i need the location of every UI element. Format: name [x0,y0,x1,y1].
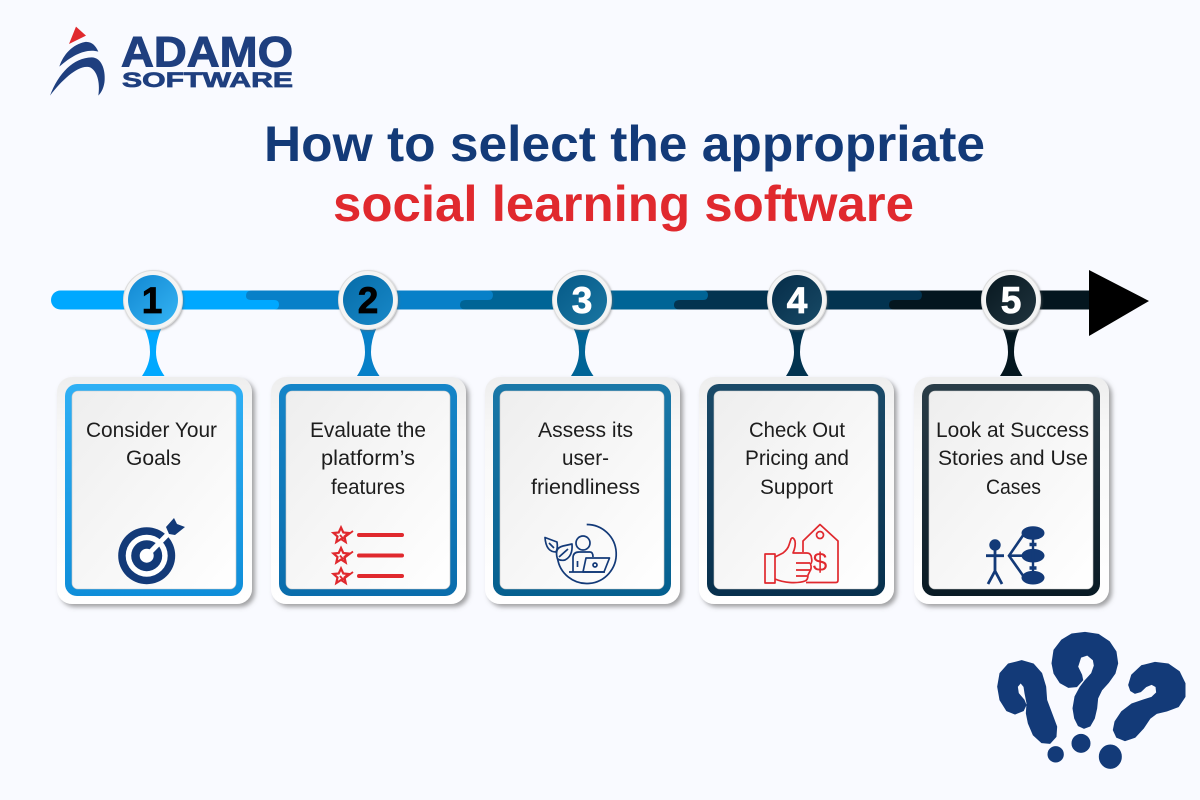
step 4 text: Check Out [749,418,845,442]
icon: person at laptop with leaves [545,524,616,584]
right question mark [1099,662,1185,768]
step 4 text [745,418,849,499]
icon: person and use-case diagram [986,526,1044,584]
step 4 badge: 4 [787,280,808,321]
timeline arrow [51,270,1149,336]
step 4 text: Pricing and [745,446,849,470]
step 2 text: platform’s [321,446,415,470]
step 2 badge [338,270,398,330]
step 4 badge [768,270,826,330]
step 1 text [86,418,217,470]
title: social learning software [333,176,914,232]
step 3 badge [552,270,612,330]
step 1 text: Goals [126,446,181,470]
icon: starred checklist [334,528,402,583]
step 1 text: Consider Your [86,418,217,442]
logo wordmark: ADAMO [121,28,293,76]
step 5 text: Cases [986,475,1041,499]
icon: thumbs up with price tag: $ [813,547,828,577]
panel: step 4 Check Out Pricing and Support [699,377,894,604]
step 5 text [936,418,1089,499]
step 5 text: Look at Success [936,418,1089,442]
step 1 connector [142,328,164,376]
panel: step 5 Look at Success Stories and Use Cases [914,377,1109,604]
step 1 badge: 1 [142,280,162,321]
left question mark [998,661,1063,762]
step 4 text: Support [760,475,833,499]
logo wordmark: SOFTWARE [122,69,293,92]
arrow head [1089,270,1149,336]
step 2 text: features [331,475,405,499]
logo: Adamo Software [50,27,293,96]
title: How to select the appropriate [264,116,985,172]
step 4 connector [786,328,808,376]
step 3 text [531,418,640,499]
middle question mark [1052,632,1118,752]
step 1 badge [124,270,182,330]
panel: step 3 Assess its user-friendliness [485,377,680,604]
step 5 badge: 5 [1001,280,1021,321]
step 3 text: user- [562,446,609,470]
step 2 badge: 2 [358,280,378,321]
step 3 connector [571,328,594,376]
icon: thumbs up with price tag [765,524,838,583]
title [264,116,985,232]
step 5 connector [1000,328,1022,376]
step 3 badge: 3 [572,280,592,321]
panel: step 1 Consider Your Goals [57,377,252,604]
icon: target with arrow [118,518,185,584]
step 5 badge [982,270,1040,330]
step 5 text: Stories and Use [938,446,1088,470]
logo mark [50,27,105,96]
step 2 connector [357,328,380,376]
step 2 text [310,418,426,499]
step 2 text: Evaluate the [310,418,426,442]
icon: three question marks [998,632,1185,768]
step 3 text: friendliness [531,475,640,499]
panel: step 2 Evaluate the platform's features [271,377,466,604]
step 3 text: Assess its [538,418,633,442]
